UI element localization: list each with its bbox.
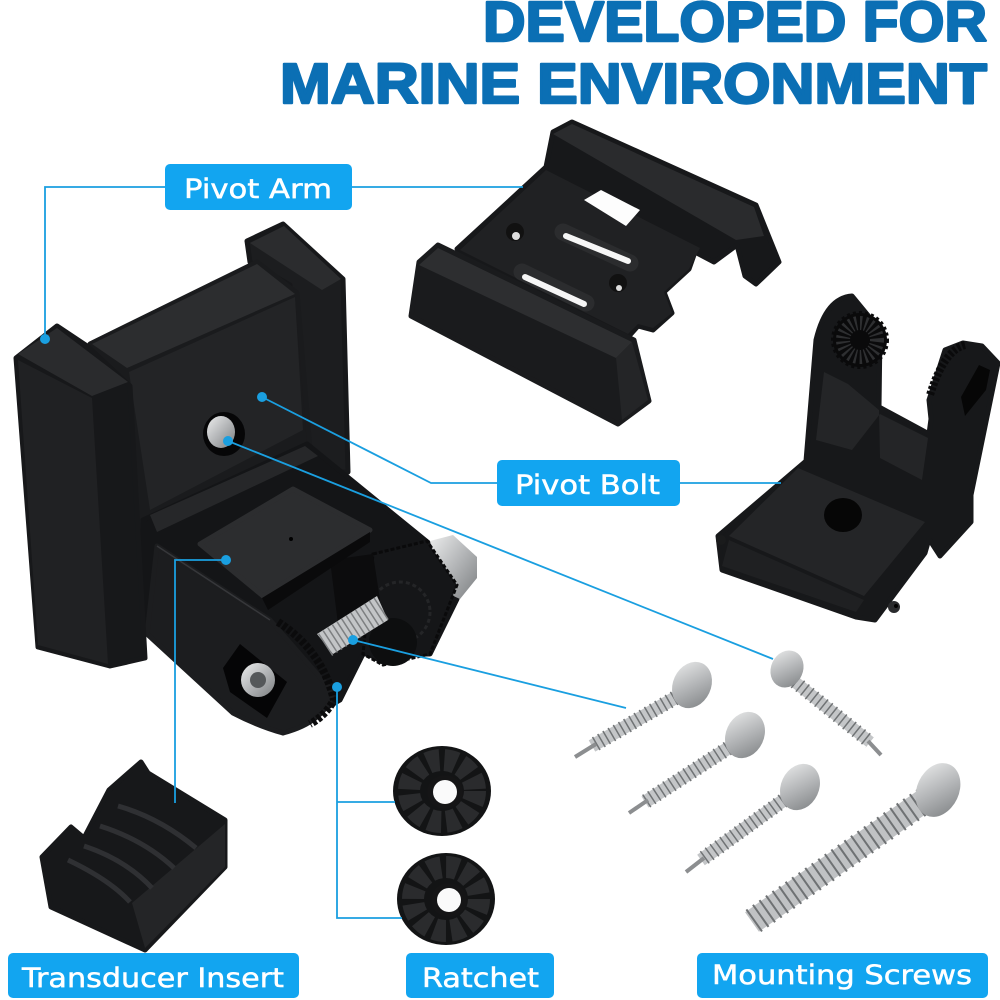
icon: screw 3 xyxy=(686,757,827,872)
callout lines xyxy=(40,187,781,918)
title xyxy=(280,0,987,116)
icon: screw 1 xyxy=(575,655,719,757)
lower arm xyxy=(143,444,457,733)
icon: screw 2 xyxy=(629,705,772,813)
photo: transducer insert xyxy=(42,762,225,950)
threaded bolt xyxy=(317,596,388,654)
label: Pivot Bolt: Pivot Bolt xyxy=(515,470,660,501)
label: Mounting Screws: Mounting Screws xyxy=(712,960,972,991)
label: Pivot Arm: Pivot Arm xyxy=(184,174,332,205)
label: Pivot Bolt xyxy=(497,460,680,506)
photo: mounting screws xyxy=(575,645,969,922)
photo: ratchet washers xyxy=(393,746,495,945)
label: Mounting Screws xyxy=(697,953,988,998)
screw hole xyxy=(203,412,245,456)
label: Transducer Insert: Transducer Insert xyxy=(21,963,284,994)
label: Transducer Insert xyxy=(8,953,299,998)
near lobe xyxy=(147,546,333,733)
label: Ratchet xyxy=(406,953,554,998)
rear upright xyxy=(247,224,348,472)
back plate xyxy=(90,262,310,560)
hex socket xyxy=(223,644,287,718)
icon: upper ratchet xyxy=(393,746,491,836)
photo: pivot arm part xyxy=(411,122,779,424)
insert top xyxy=(200,489,370,596)
photo: pivot bracket part xyxy=(716,296,998,620)
label: Pivot Arm xyxy=(165,164,352,210)
title: MARINE ENVIRONMENT xyxy=(280,52,987,116)
left jaw xyxy=(16,326,145,666)
photo: assembled transducer mount xyxy=(16,224,477,733)
icon: lower ratchet xyxy=(397,853,495,945)
far ratchet and nut xyxy=(430,535,477,599)
icon: long screw xyxy=(752,756,969,922)
icon: screw 4 xyxy=(764,645,881,755)
label: Ratchet: Ratchet xyxy=(422,963,539,994)
